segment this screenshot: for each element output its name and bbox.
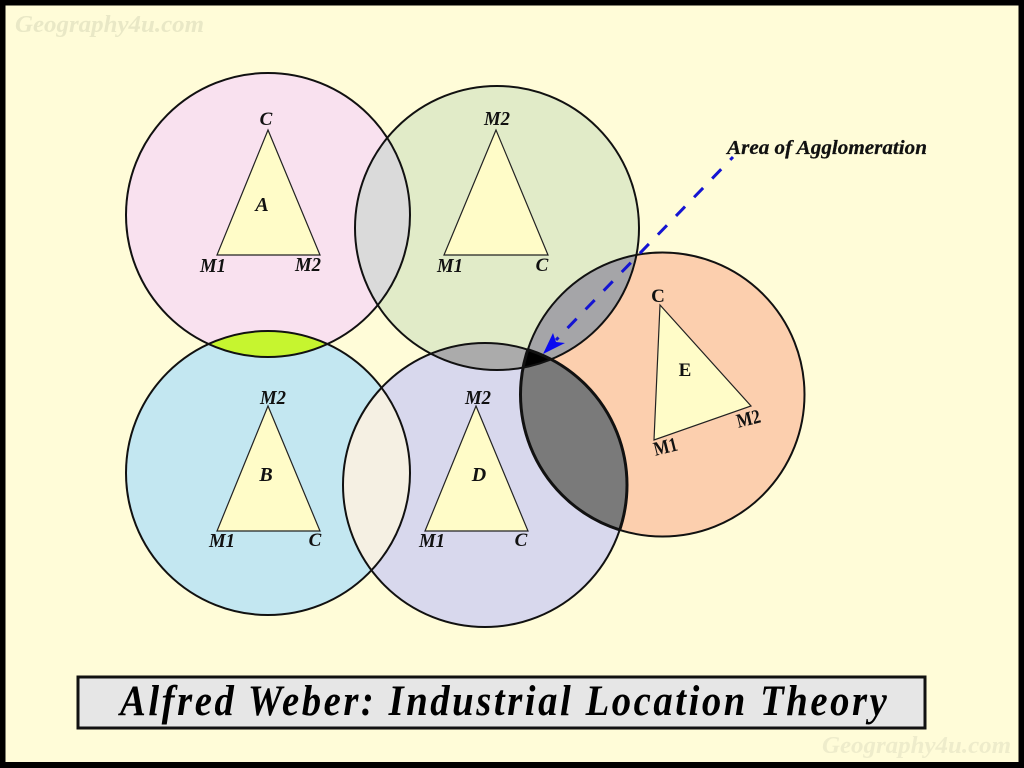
triangle green circle [436,108,549,277]
circle outlines [126,73,804,627]
triangle D: M1 [418,530,445,552]
triangle B: M1 [208,530,235,552]
arrow: to area of agglomeration [543,157,733,354]
triangle E: M1 [651,434,680,461]
triangle green circle: M2 [483,108,510,130]
triangle B: C [309,530,322,551]
triangle E: E [679,360,691,381]
overlap regions [126,86,804,627]
triangle B: M2 [259,387,286,409]
triangle A [199,109,321,277]
triangle D [418,387,528,552]
triangle A: M1 [199,255,226,277]
triangle D: M2 [464,387,491,409]
triangle D: D [471,464,486,486]
circle fills [126,73,804,627]
triangle A: A [253,194,269,216]
triangle B: B [258,464,273,486]
triangle A: C [260,109,273,130]
triangle E: C [651,286,665,307]
triangle E: M2 [734,406,763,433]
triangle D: C [515,530,528,551]
triangle green circle: C [536,255,549,276]
triangle E [651,286,763,461]
triangle B [208,387,322,552]
triangle green circle: M1 [436,255,463,277]
watermark bottom: Geography4u.com [822,733,1011,759]
title box: Alfred Weber: Industrial Location Theory [117,677,888,724]
triangle A: M2 [294,254,321,276]
watermark top: Geography4u.com [15,12,204,38]
callout label: Area of Agglomeration [725,137,927,159]
bold outline of dark overlap lens [519,348,628,531]
